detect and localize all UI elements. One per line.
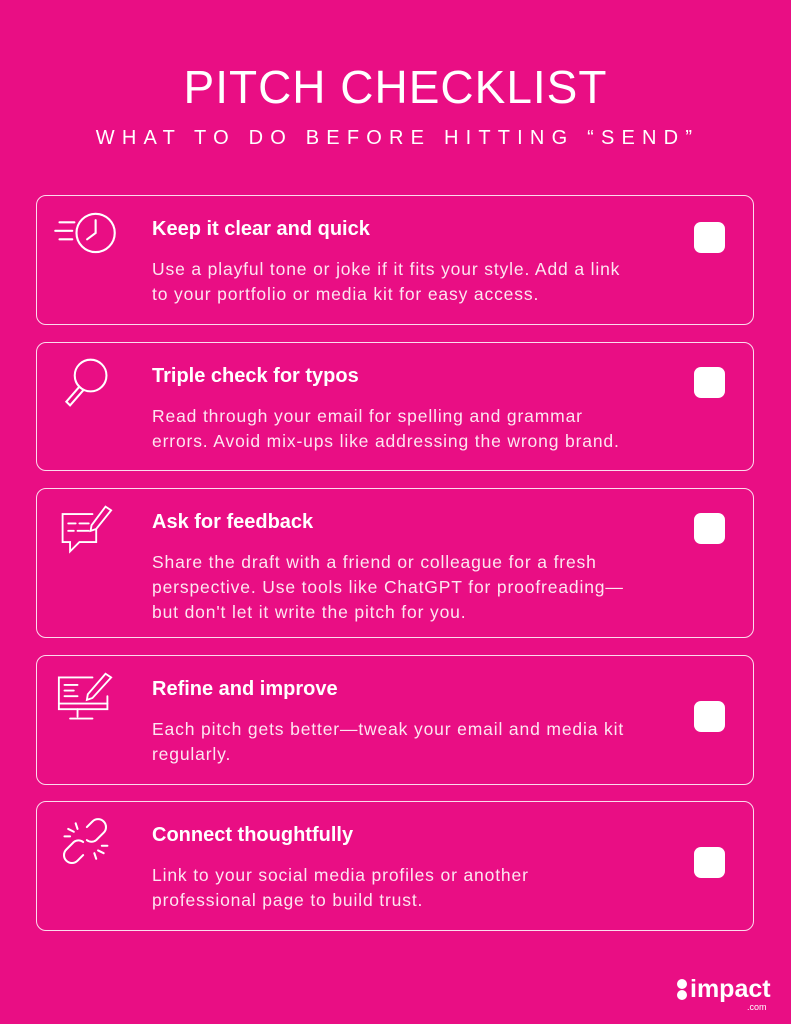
title: PITCH CHECKLIST: [184, 61, 607, 113]
text: Share the draft with a friend or colleague for a fresh perspective. Use tools like ChatGPT for proofreading—but don't let it write the pitch for you.: [152, 552, 624, 622]
checkbox: [694, 701, 725, 732]
logo: impact.com: [677, 975, 771, 1012]
heading: Triple check for typos: [152, 365, 359, 387]
checkbox: [694, 222, 725, 253]
logo: impact.com: impact: [690, 975, 771, 1003]
icon: speed clock: [54, 212, 116, 254]
icon: monitor with pen: [58, 672, 112, 720]
card 5: [36, 801, 754, 931]
icon: magnifier: [65, 358, 108, 407]
card 4: [36, 655, 754, 785]
card 1: [36, 195, 754, 325]
checkbox: [694, 367, 725, 398]
text: Each pitch gets better—tweak your email and media kit regularly.: [152, 719, 624, 764]
text: Read through your email for spelling and grammar errors. Avoid mix-ups like addressing the wrong brand.: [152, 406, 620, 451]
logo: impact.com: .com: [747, 1002, 767, 1012]
subtitle: WHAT TO DO BEFORE HITTING “SEND”: [96, 127, 699, 149]
card 3: [36, 488, 754, 638]
icon: chat with pen: [62, 505, 112, 554]
heading: Refine and improve: [152, 678, 338, 700]
checkbox: [694, 513, 725, 544]
heading: Keep it clear and quick: [152, 218, 370, 240]
checkbox: [694, 847, 725, 878]
heading: Connect thoughtfully: [152, 824, 353, 846]
icon: broken link: [63, 818, 108, 864]
heading: Ask for feedback: [152, 511, 313, 533]
text: Use a playful tone or joke if it fits your style. Add a link to your portfolio or media kit for easy access.: [152, 259, 620, 304]
card 2: [36, 342, 754, 471]
text: Link to your social media profiles or another professional page to build trust.: [152, 865, 529, 910]
